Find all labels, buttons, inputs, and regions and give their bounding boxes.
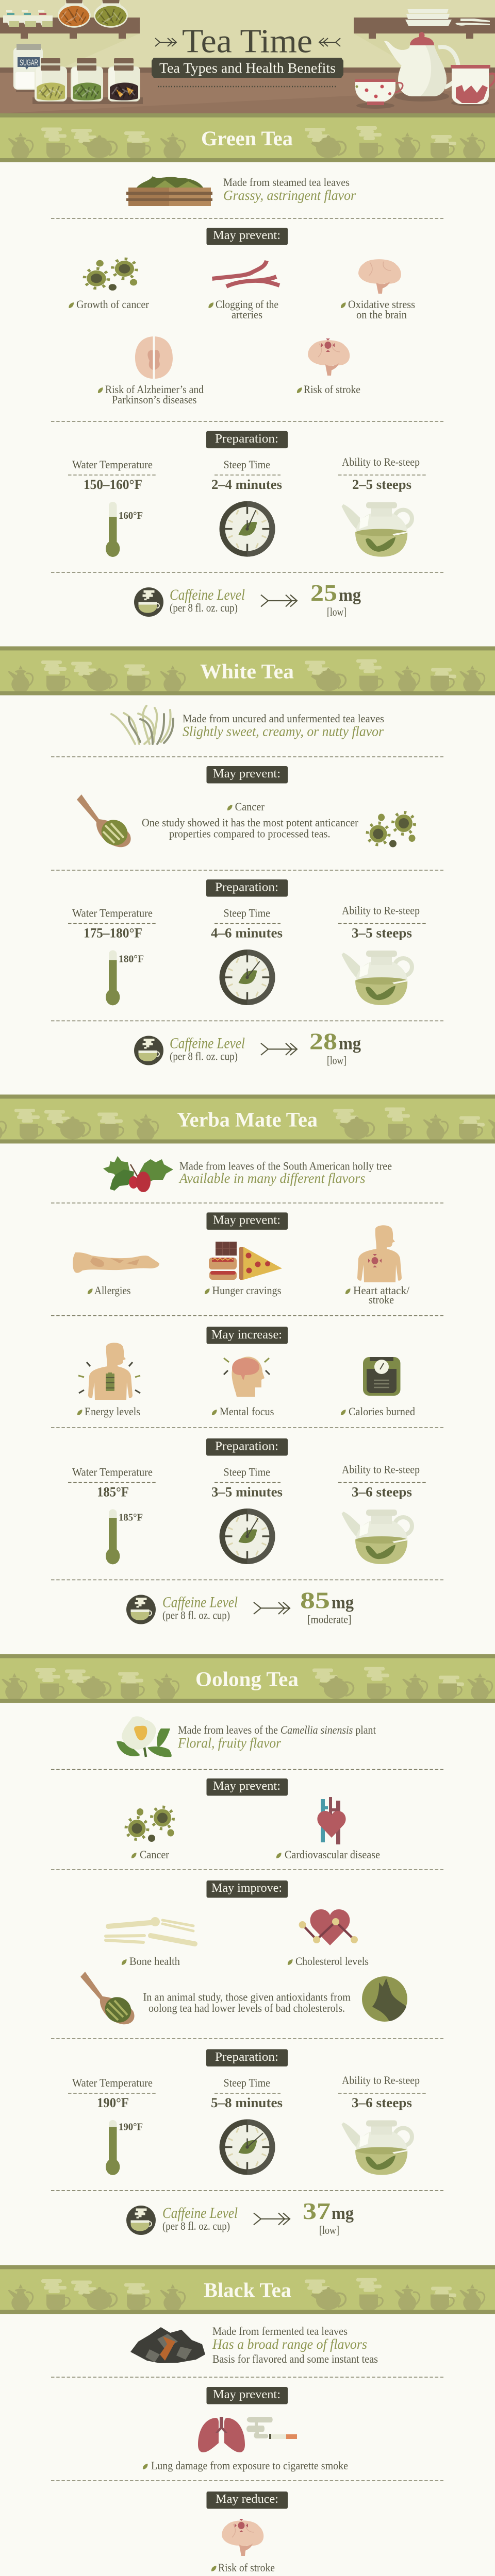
steep time: 3–5 minutes <box>211 1484 283 1499</box>
heading: preparation <box>206 879 288 896</box>
mug <box>451 65 495 106</box>
thermometer <box>106 2120 143 2175</box>
heading: may prevent <box>206 228 288 245</box>
label: alzheimer's and parkinson's: Parkinson’s diseases <box>112 393 197 406</box>
label: bone health: Bone health <box>129 1955 180 1968</box>
heading: may improve: May improve: <box>211 1882 282 1895</box>
ability to re-steep: Ability to Re-steep <box>342 1463 420 1476</box>
water temperature: 175–180°F <box>84 925 142 940</box>
teapot <box>341 1510 412 1564</box>
banner: oolong tea: Oolong Tea <box>195 1667 299 1691</box>
jar: pale tea <box>35 58 67 101</box>
heading: may prevent: May prevent: <box>213 229 280 242</box>
description: Made from fermented tea leaves <box>212 2325 348 2337</box>
header scene <box>0 0 495 113</box>
icon: holly leaves and berries <box>103 1156 173 1192</box>
description: Made from leaves of the Camellia sinensis plant <box>178 1723 376 1736</box>
description: Grassy, astringent flavor <box>223 188 356 203</box>
caffeine level: 37 <box>303 2198 331 2224</box>
description <box>177 1723 376 1751</box>
section: white tea <box>0 646 495 1066</box>
label: risk of stroke: Risk of stroke <box>218 2561 275 2574</box>
banner: green tea <box>0 113 495 162</box>
thermometer: 190°F <box>119 2121 143 2132</box>
caffeine level: mg <box>332 2204 354 2223</box>
heading: may prevent <box>206 2387 288 2404</box>
description: Available in many different flavors <box>178 1171 365 1186</box>
caffeine level: (per 8 fl. oz. cup) <box>162 1608 230 1621</box>
ability to re-steep: Ability to Re-steep <box>342 904 420 917</box>
heading: preparation <box>206 1438 288 1456</box>
banner: green tea: Green Tea <box>201 127 293 150</box>
heading: preparation: Preparation: <box>215 2050 278 2064</box>
description: Made from uncured and unfermented tea leaves <box>183 712 384 725</box>
icon: dog in circle <box>362 1976 407 2022</box>
label: heart attack / stroke: Heart attack/ <box>353 1284 410 1297</box>
heading: preparation: Preparation: <box>215 1439 278 1453</box>
water temperature <box>68 906 157 1005</box>
teapot <box>341 2121 412 2175</box>
right shelf <box>354 9 495 39</box>
banner: black tea <box>0 2265 495 2314</box>
description: Made from leaves of the South American holly tree <box>179 1159 392 1173</box>
heading: may prevent: May prevent: <box>213 1780 280 1793</box>
steep time: Steep Time <box>224 906 270 919</box>
label: clogging of the arteries <box>208 298 278 321</box>
thermometer: 185°F <box>119 1512 143 1523</box>
steep time: Steep Time <box>224 458 270 471</box>
water temperature: Water Temperature <box>72 1465 153 1478</box>
heading: preparation: Preparation: <box>215 432 278 446</box>
study note <box>142 816 359 840</box>
steep time: Steep Time <box>224 2076 270 2089</box>
label: alzheimer's and parkinson's: Risk of Alzheimer’s and <box>105 383 204 396</box>
heading: may prevent: May prevent: <box>213 2388 280 2401</box>
study note: oolong tea had lower levels of bad cholesterols. <box>148 2002 345 2014</box>
steep time <box>211 2076 283 2175</box>
jar: mixed tea <box>108 58 140 101</box>
description: Made from steamed tea leaves <box>223 176 350 189</box>
steep time: 5–8 minutes <box>211 2095 283 2110</box>
icon: heart attack torso <box>357 1225 402 1282</box>
heading: may reduce: May reduce: <box>216 2493 278 2506</box>
section: black tea <box>0 2265 495 2576</box>
tea cup <box>355 79 403 109</box>
caffeine level: Caffeine Level <box>170 1035 245 1052</box>
thermometer: 180°F <box>119 953 144 964</box>
label: clogging of the arteries: Clogging of the <box>216 298 278 311</box>
caffeine level: Caffeine Level <box>162 1594 238 1611</box>
title arrow left <box>155 38 176 46</box>
description <box>178 1159 392 1186</box>
label: heart attack / stroke <box>345 1284 410 1306</box>
title arrow right <box>319 38 340 46</box>
icon: cancer cells <box>126 1807 174 1842</box>
banner: black tea: Black Tea <box>204 2278 291 2302</box>
caffeine level: [low] <box>327 1054 346 1066</box>
caffeine level: 25 <box>310 580 337 606</box>
caffeine level: [low] <box>327 605 346 618</box>
icon: arteries <box>212 261 279 286</box>
water temperature: Water Temperature <box>72 906 153 919</box>
ability to re-steep: 3–5 steeps <box>352 925 412 940</box>
icon: spoon of oolong <box>80 1972 136 2028</box>
title <box>155 23 340 60</box>
caffeine level: [low] <box>319 2224 339 2236</box>
icon: heart with cholesterol <box>299 1909 358 1945</box>
study note <box>143 1991 351 2014</box>
label: cancer: Cancer <box>235 800 265 813</box>
banner: oolong tea <box>0 1654 495 1703</box>
steep time: 4–6 minutes <box>211 925 283 940</box>
study note: In an animal study, those given antioxidants from <box>143 1991 351 2003</box>
description: Has a broad range of flavors <box>212 2336 367 2352</box>
caffeine level: 85 <box>300 1587 330 1613</box>
icon: brain <box>358 259 401 294</box>
steep time: 2–4 minutes <box>211 477 282 492</box>
preparation and caffeine <box>51 879 443 1066</box>
water temperature: Water Temperature <box>72 2076 153 2089</box>
water temperature: 190°F <box>97 2095 129 2110</box>
description <box>212 2325 378 2365</box>
ability to re-steep: 2–5 steeps <box>352 477 411 492</box>
banner: yerba mate tea <box>0 1094 495 1144</box>
heading: preparation: Preparation: <box>215 880 278 894</box>
sugar jar <box>13 44 43 90</box>
heading: preparation <box>206 431 288 448</box>
water temperature <box>68 458 157 557</box>
counter jars <box>13 44 143 104</box>
heading: may increase <box>206 1327 288 1344</box>
steep time: Steep Time <box>224 1465 270 1478</box>
caffeine level <box>126 2198 354 2236</box>
preparation and caffeine <box>51 431 443 618</box>
banner: yerba mate tea: Yerba Mate Tea <box>177 1108 318 1131</box>
description: Basis for flavored and some instant teas <box>212 2352 378 2365</box>
clock <box>222 1509 275 1564</box>
icon: lungs and cigarette <box>198 2417 297 2452</box>
section: green tea <box>0 113 495 618</box>
caffeine level: mg <box>339 1034 361 1053</box>
subtitle ribbon: Tea Types and Health Benefits <box>159 60 336 76</box>
study note: properties compared to processed teas. <box>169 827 330 840</box>
icon: stroke brain <box>308 338 350 376</box>
banner: white tea: White Tea <box>200 659 294 683</box>
caffeine level <box>126 1587 354 1626</box>
heading: may reduce <box>206 2492 288 2509</box>
section: oolong tea <box>0 1654 495 2236</box>
steep time <box>211 1465 283 1564</box>
icon: white tea leaves <box>111 706 173 744</box>
label: mental focus: Mental focus <box>220 1405 274 1418</box>
label: risk of stroke: Risk of stroke <box>304 383 360 396</box>
icon: arm with rash <box>73 1252 159 1273</box>
caffeine level: mg <box>332 1593 354 1612</box>
clock <box>222 501 275 557</box>
water temperature <box>68 2076 157 2175</box>
icon: black tea pile <box>130 2327 205 2363</box>
ability to re-steep: Ability to Re-steep <box>342 455 420 468</box>
thermometer <box>106 1509 143 1564</box>
icon: junk food <box>209 1242 282 1280</box>
ability to re-steep: 3–6 steeps <box>352 2095 412 2110</box>
steep time <box>211 458 282 557</box>
label: oxidative stress: on the brain <box>356 308 407 321</box>
heading: may improve <box>206 1880 288 1898</box>
jar: green tea <box>71 58 103 101</box>
teapot <box>341 502 412 557</box>
heading: may prevent <box>206 1212 288 1230</box>
spoons <box>455 19 490 26</box>
caffeine level: (per 8 fl. oz. cup) <box>170 1049 238 1062</box>
steep time <box>211 906 283 1005</box>
plates <box>405 9 452 26</box>
icon: energy torso <box>78 1343 140 1400</box>
study note: One study showed it has the most potent anticancer <box>142 816 359 829</box>
icon: crate of leaves <box>126 176 212 206</box>
heading: may prevent: May prevent: <box>213 1213 280 1227</box>
water temperature: Water Temperature <box>72 458 153 471</box>
icon: brain top view <box>135 336 173 379</box>
label: allergies: Allergies <box>94 1284 131 1297</box>
title text: Tea Time <box>182 23 312 60</box>
label: clogging of the arteries: arteries <box>232 308 262 321</box>
label: heart attack / stroke: stroke <box>369 1293 394 1306</box>
ability to re-steep <box>338 2074 426 2175</box>
ability to re-steep: 3–6 steeps <box>352 1484 412 1499</box>
icon: spoon of leaves <box>77 794 133 851</box>
icon: cancer cells <box>85 259 137 291</box>
description <box>183 712 384 739</box>
icon: heart with vessels <box>317 1797 346 1844</box>
icon: bones <box>106 1919 195 1944</box>
label: cardiovascular disease: Cardiovascular disease <box>285 1848 380 1861</box>
label: lung damage: Lung damage from exposure to cigarette smoke <box>151 2459 348 2472</box>
water temperature: 150–160°F <box>84 477 142 492</box>
label: growth of cancer: Growth of cancer <box>76 298 150 311</box>
heading: may prevent: May prevent: <box>213 767 280 781</box>
icon: cancer cells <box>367 812 416 847</box>
caffeine level: Caffeine Level <box>170 586 245 603</box>
heading: may increase: May increase: <box>211 1328 282 1342</box>
label: calories burned: Calories burned <box>349 1405 415 1418</box>
water temperature <box>68 1465 157 1564</box>
ability to re-steep <box>338 904 426 1005</box>
label: alzheimer's and parkinson's <box>98 383 204 406</box>
description <box>223 176 356 203</box>
label: oxidative stress: Oxidative stress <box>348 298 415 311</box>
label: hunger cravings: Hunger cravings <box>212 1284 282 1297</box>
clock <box>222 2120 275 2175</box>
heading: may prevent <box>206 766 288 783</box>
description: Slightly sweet, creamy, or nutty flavor <box>183 723 384 739</box>
banner: white tea <box>0 646 495 696</box>
caffeine level <box>134 1028 361 1066</box>
preparation and caffeine <box>51 2049 443 2236</box>
heading: preparation <box>206 2049 288 2066</box>
label: cholesterol levels: Cholesterol levels <box>295 1955 369 1968</box>
teapot <box>384 32 458 101</box>
clock <box>222 950 275 1005</box>
ability to re-steep <box>338 1463 426 1564</box>
shelf jar: orange tea <box>58 0 91 28</box>
icon: head with brain <box>224 1357 270 1397</box>
thermometer: 160°F <box>119 510 143 521</box>
tea bags <box>3 10 53 27</box>
ability to re-steep <box>338 455 426 557</box>
water temperature: 185°F <box>97 1484 129 1499</box>
heading: may prevent <box>206 1778 288 1796</box>
caffeine level: Caffeine Level <box>162 2205 238 2222</box>
icon: camellia flower <box>117 1716 172 1757</box>
section: yerba mate tea <box>0 1094 495 1626</box>
shelf jar: green tea <box>94 0 128 28</box>
subtitle ribbon <box>152 58 343 78</box>
left shelf <box>0 0 140 39</box>
caffeine level: 28 <box>309 1028 337 1054</box>
teapot <box>341 951 412 1005</box>
description: Floral, fruity flavor <box>177 1735 281 1751</box>
preparation and caffeine <box>51 1438 443 1626</box>
icon: stroke brain <box>222 2519 263 2556</box>
caffeine level <box>134 580 361 618</box>
caffeine level: [moderate] <box>307 1613 352 1626</box>
icon: bathroom scale <box>363 1357 400 1396</box>
thermometer <box>106 502 143 557</box>
sugar jar: SUGAR <box>20 58 38 67</box>
caffeine level: mg <box>339 586 361 605</box>
label: cancer: Cancer <box>140 1848 170 1861</box>
caffeine level: (per 8 fl. oz. cup) <box>162 2219 230 2232</box>
label: oxidative stress <box>341 298 415 321</box>
ability to re-steep: Ability to Re-steep <box>342 2074 420 2087</box>
label: energy levels: Energy levels <box>85 1405 140 1418</box>
thermometer <box>106 950 144 1005</box>
caffeine level: (per 8 fl. oz. cup) <box>170 601 238 614</box>
